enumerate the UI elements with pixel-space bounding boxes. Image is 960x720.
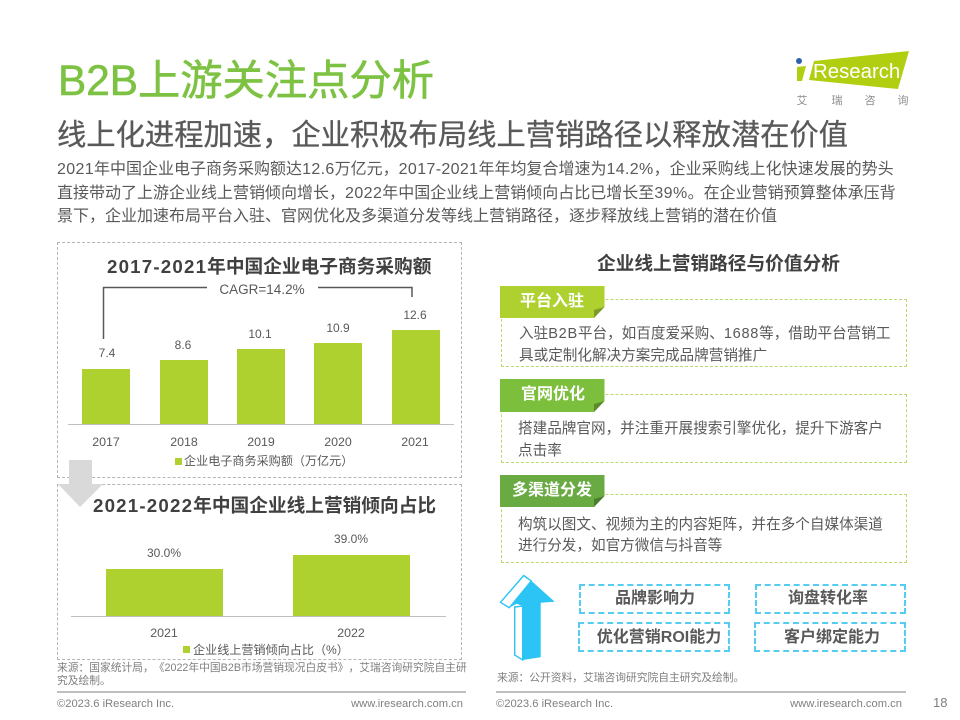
legend: online share: 企业线上营销倾向占比（%） (193, 643, 349, 657)
logo: iResearch (796, 51, 909, 108)
panel: website optimization: 点击率 (518, 443, 562, 459)
bar chart: online share: 2022 (337, 626, 365, 640)
footer: left: www.iresearch.com.cn (351, 698, 463, 710)
value: marketing ROI (578, 622, 730, 652)
footer: left: ©2023.6 iResearch Inc. (57, 698, 174, 710)
bar chart: procurement: 2019 (247, 435, 275, 449)
logo: iResearch: 咨 (864, 92, 876, 108)
source: left (57, 662, 467, 687)
footer: right: ©2023.6 iResearch Inc. (496, 698, 613, 710)
value: brand influence (579, 584, 730, 614)
bar chart: procurement: 12.6 (403, 308, 427, 322)
title: B2B上游关注点分析 (58, 57, 434, 104)
intro text: 2021年中国企业电子商务采购额达12.6万亿元，2017-2021年年均复合增速为14.2%，企业采购线上化快速发展的势头 (57, 161, 894, 178)
footer: right: www.iresearch.com.cn (790, 698, 902, 710)
panel: multichannel distribution: 进行分发，如官方微信与抖音等 (518, 538, 722, 554)
bar chart: procurement: 8.6 (175, 338, 191, 352)
CAGR label: CAGR=14.2% (219, 282, 305, 297)
panel: platform entry: 入驻B2B平台，如百度爱采购、1688等，借助平台营销工 (519, 326, 890, 342)
bar chart: procurement: 10.1 (248, 327, 272, 341)
panel: website optimization: 搭建品牌官网，并注重开展搜索引擎优化，提升下游客户 (518, 421, 883, 437)
logo: iResearch: Research (813, 61, 900, 83)
footer: right (496, 691, 906, 710)
panel: online marketing share chart (57, 484, 462, 660)
value: customer binding (754, 622, 906, 652)
logo: iResearch: 询 (898, 92, 908, 108)
CAGR bracket (102, 286, 413, 339)
panel: multichannel distribution (500, 475, 907, 563)
icon: blue up arrow (500, 574, 555, 662)
panel: platform entry (500, 286, 907, 367)
arrow: down (58, 460, 103, 507)
bar chart: procurement: 2021 (401, 435, 429, 449)
value: inquiry conversion: 询盘转化率 (788, 590, 868, 607)
intro text: 直接带动了上游企业线上营销倾向增长，2022年中国企业线上营销倾向占比已增长至39%。在企业营销预算整体承压背 (57, 185, 896, 202)
panel: platform entry: 具或定制化解决方案完成品牌营销推广 (519, 348, 767, 364)
intro text: 景下，企业加速布局平台入驻、官网优化及多渠道分发等线上营销路径，逐步释放线上营销的潜在价值 (57, 208, 777, 225)
panel: platform entry: 平台入驻 (520, 293, 584, 310)
bar chart: online share (71, 532, 446, 640)
source: left: 来源：国家统计局，《2022年中国B2B市场营销现况白皮书》，艾瑞咨询研究院自主研 (57, 662, 467, 674)
chart title: online share: 2021-2022年中国企业线上营销倾向占比 (93, 495, 436, 516)
intro text (57, 160, 896, 225)
bar chart: online share: 2021 (150, 626, 178, 640)
subtitle: 线上化进程加速，企业积极布局线上营销路径以释放潜在价值 (57, 119, 848, 152)
value: customer binding: 客户绑定能力 (784, 629, 880, 646)
bar chart: procurement: 10.9 (326, 321, 350, 335)
chart title: procurement: 2017-2021年中国企业电子商务采购额 (107, 256, 431, 277)
footer: left (57, 691, 466, 710)
page number: 18 (933, 695, 947, 710)
bar chart: procurement: 2020 (324, 435, 352, 449)
panel: multichannel distribution: 构筑以图文、视频为主的内容矩阵，并在多个自媒体渠道 (518, 517, 883, 533)
legend: procurement: 企业电子商务采购额（万亿元） (184, 454, 353, 468)
bar chart: procurement: 2018 (170, 435, 198, 449)
source: left: 究及绘制。 (57, 675, 111, 687)
value: brand influence: 品牌影响力 (615, 590, 695, 607)
bar chart: procurement: 2017 (92, 435, 120, 449)
bar chart: procurement (68, 308, 454, 449)
bar chart: online share: 39.0% (334, 532, 368, 546)
panel: multichannel distribution: 多渠道分发 (512, 482, 592, 499)
heading: marketing path: 企业线上营销路径与价值分析 (597, 253, 840, 274)
bar chart: procurement: 7.4 (99, 346, 115, 360)
logo: iResearch: 艾 (796, 92, 808, 108)
source: right: 来源：公开资料，艾瑞咨询研究院自主研究及绘制。 (497, 672, 744, 684)
panel: website optimization (500, 379, 907, 463)
value: marketing ROI: 优化营销ROI能力 (597, 629, 721, 646)
panel: website optimization: 官网优化 (521, 386, 585, 403)
value: inquiry conversion (755, 584, 906, 614)
logo: iResearch: 瑞 (832, 92, 842, 108)
bar chart: online share: 30.0% (147, 546, 181, 560)
panel: procurement chart (57, 242, 462, 478)
